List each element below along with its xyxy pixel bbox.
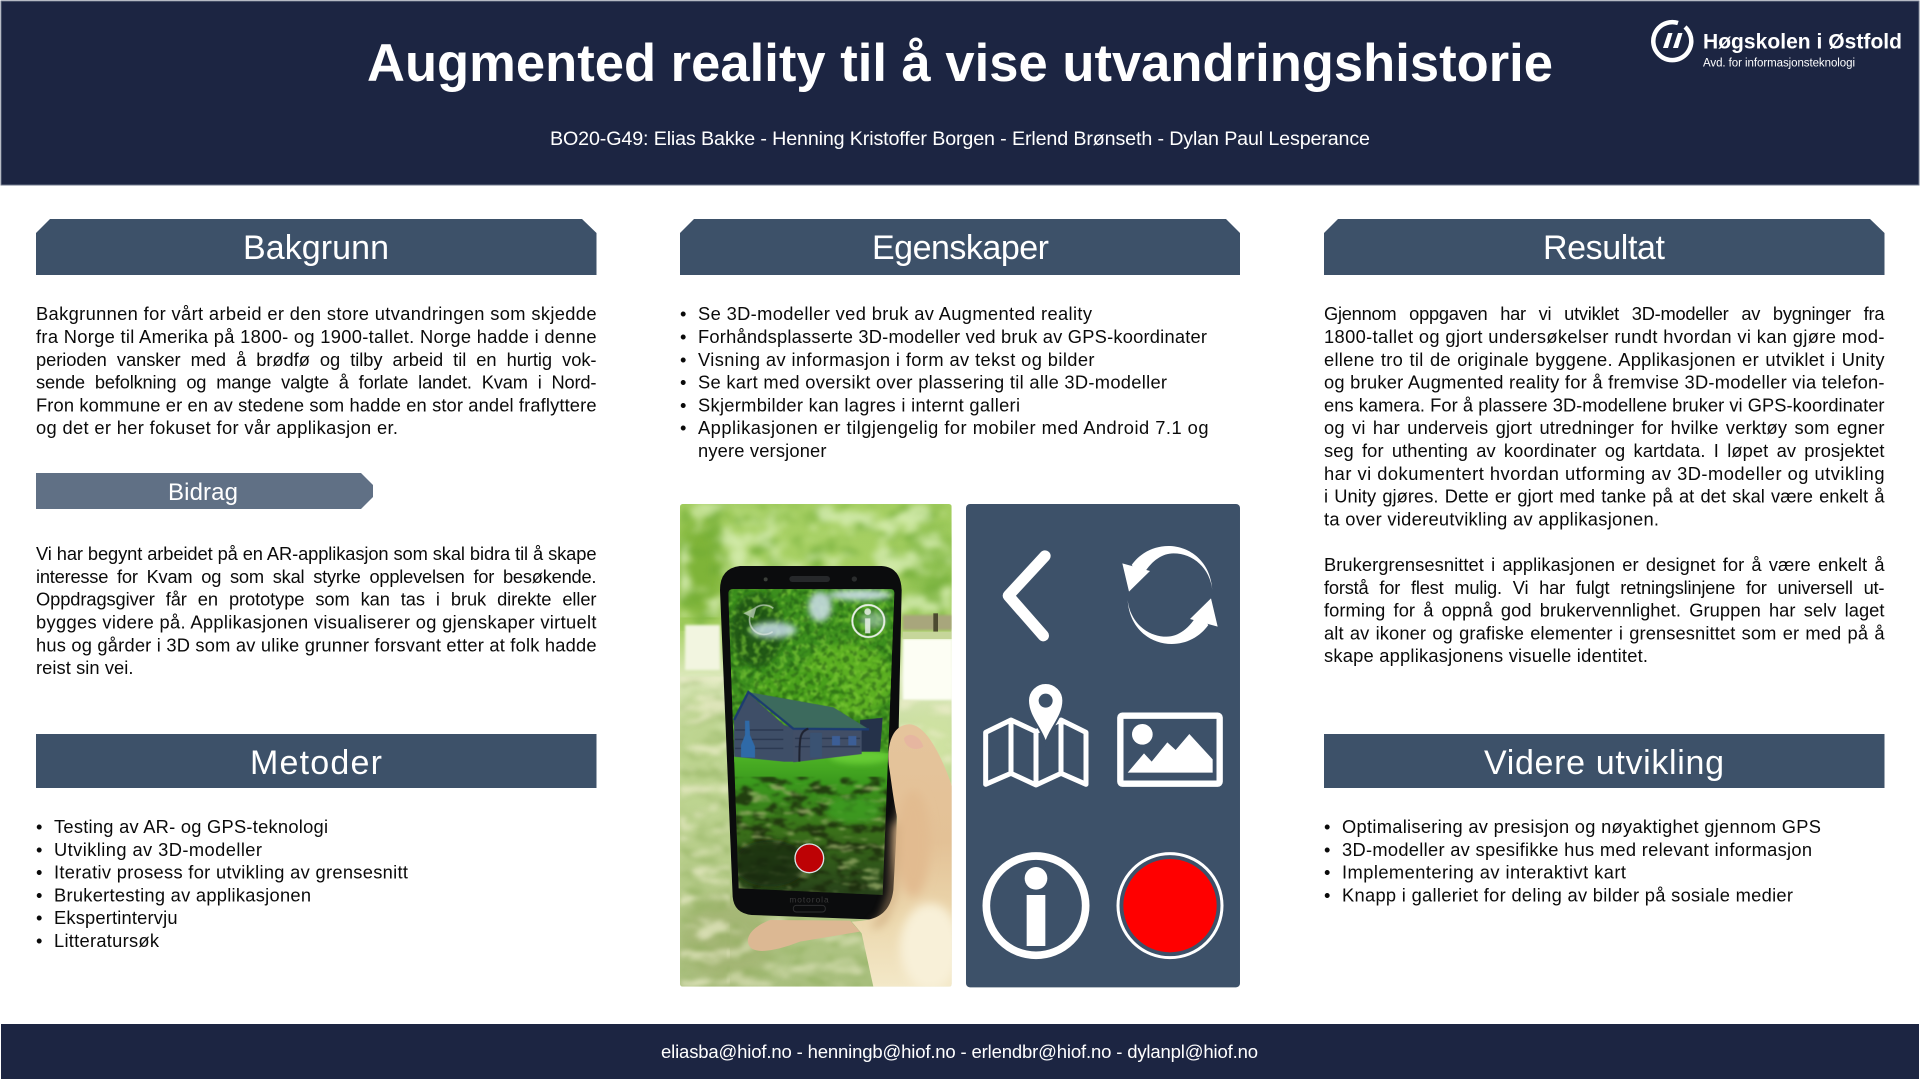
- list: Metoder: •: [36, 930, 42, 951]
- heading: Bidrag: Bidrag: [168, 479, 238, 506]
- panel: app icons: [966, 504, 1240, 987]
- heading: Egenskaper: [680, 219, 1240, 275]
- text block: Resultat: ellene tro til de originale byggene. Applikasjonen er utviklet i Unity: [1324, 349, 1885, 370]
- text block: Bidrag: Vi har begynt arbeidet på en AR-applikasjon som skal bidra til å skape: [36, 543, 596, 564]
- text block: Bakgrunn: [36, 303, 596, 438]
- text block: Resultat: [1324, 303, 1885, 666]
- list: Egenskaper: •: [680, 372, 686, 392]
- header band: [1, 1, 1919, 185]
- heading: Videre utvikling: Videre utvikling: [1484, 744, 1724, 782]
- text block: Bidrag: Oppdragsgiver får en prototype som kan tas i bruk direkte eller: [36, 588, 596, 610]
- icon: record button: [1118, 854, 1222, 958]
- screen button: info: [852, 605, 884, 637]
- heading: Metoder: [36, 734, 596, 788]
- list: Videre utvikling: Optimalisering av presisjon og nøyaktighet gjennom GPS: [1342, 816, 1821, 837]
- list: Metoder: Iterativ prosess for utvikling av grensesnitt: [54, 862, 408, 882]
- list: Metoder: Litteratursøk: [54, 930, 160, 951]
- list: Metoder: •: [36, 862, 42, 882]
- text block: Bidrag: bygges videre på. Applikasjonen visualiserer og gjenskaper virtuelt: [36, 612, 596, 632]
- text block: Bakgrunn: fra Norge til Amerika på 1800- og 1900-tallet. Norge hadde i denne: [36, 326, 596, 347]
- heading: Bakgrunn: Bakgrunn: [243, 229, 389, 267]
- heading: Videre utvikling: [1324, 734, 1884, 788]
- list: Egenskaper: Skjermbilder kan lagres i internt galleri: [698, 394, 1020, 416]
- panel: Bidrag: [36, 473, 596, 678]
- list: Metoder: Utvikling av 3D-modeller: [54, 839, 262, 860]
- text block: Bakgrunn: sende befolkning og mange valgte å forlate landet. Kvam i Nord-: [36, 372, 596, 392]
- list: Egenskaper: •: [680, 326, 686, 347]
- heading: Egenskaper: Egenskaper: [872, 229, 1049, 267]
- list: Videre utvikling: [1324, 816, 1821, 906]
- heading: Resultat: [1324, 219, 1884, 275]
- contact emails: eliasba@hiof.no - henningb@hiof.no - erlendbr@hiof.no - dylanpl@hiof.no: [661, 1041, 1258, 1062]
- list: Videre utvikling: 3D-modeller av spesifikke hus med relevant informasjon: [1342, 839, 1812, 860]
- list: Egenskaper: Applikasjonen er tilgjengelig for mobiler med Android 7.1 og: [698, 417, 1208, 438]
- foliage texture: [680, 504, 952, 631]
- list: Egenskaper: •: [680, 394, 686, 416]
- screen lawn: [727, 753, 897, 897]
- text block: Resultat: alt av ikoner og grafiske elementer i grensesnittet som er med på å: [1324, 622, 1885, 644]
- heading: Resultat: Resultat: [1543, 229, 1666, 267]
- text block: Bidrag: [36, 543, 596, 678]
- phone speaker and brand: motorola: [789, 894, 829, 904]
- logo: Høgskolen i Østfold: [1653, 22, 1902, 70]
- text block: Resultat: forming for å oppnå god brukervennlighet. Gruppen har selv laget: [1324, 600, 1884, 620]
- photo: AR app on phone: [673, 504, 960, 990]
- list: Metoder: •: [36, 839, 42, 860]
- list: Metoder: Testing av AR- og GPS-teknologi: [54, 816, 328, 837]
- list: Videre utvikling: •: [1324, 884, 1330, 906]
- text block: Bakgrunn: Fron kommune er en av stedene som hadde en stor andel fraflyttere: [36, 394, 596, 416]
- text block: Resultat: seg for uthenting av koordinater og kartdata. I løpet av prosjektet: [1324, 440, 1884, 461]
- logo: Høgskolen i Østfold: Høgskolen i Østfold: [1703, 30, 1902, 54]
- heading: Bidrag: [36, 473, 373, 509]
- text block: Resultat: skape applikasjonens visuelle identitet.: [1324, 645, 1648, 666]
- list: Metoder: Brukertesting av applikasjonen: [54, 884, 311, 906]
- heading: Bakgrunn: [36, 219, 596, 275]
- lawn glare: [903, 638, 953, 700]
- heading: Metoder: Metoder: [250, 744, 382, 782]
- list: Metoder: Ekspertintervju: [54, 907, 178, 928]
- text block: Bidrag: hus og gårder i 3D som av ulike grunner forsvant etter at folk hadde: [36, 634, 596, 656]
- list: Metoder: •: [36, 816, 42, 837]
- text block: Bakgrunn: Bakgrunnen for vårt arbeid er den store utvandringen som skjedde: [36, 303, 596, 324]
- icon: refresh: [1122, 546, 1218, 644]
- icon: map with pin: [986, 683, 1086, 785]
- text block: Resultat: Gjennom oppgaven har vi utviklet 3D-modeller av bygninger fra: [1324, 303, 1885, 324]
- list: Videre utvikling: •: [1324, 862, 1330, 882]
- list: Metoder: •: [36, 907, 42, 928]
- list: Egenskaper: Se kart med oversikt over plassering til alle 3D-modeller: [698, 372, 1167, 392]
- text block: Resultat: forstå for flest mulig. Vi har fulgt retningslinjene for universell ut-: [1324, 577, 1884, 598]
- footer band: [1, 1024, 1919, 1079]
- phone body: [720, 566, 902, 920]
- list: Metoder: [36, 816, 408, 951]
- panel: Metoder: [36, 734, 596, 951]
- text block: Bakgrunn: perioden vansker med å brødfø og tilby arbeid til en hurtig vok-: [36, 349, 596, 370]
- list: Metoder: •: [36, 884, 42, 906]
- list: Egenskaper: Se 3D-modeller ved bruk av Augmented reality: [698, 303, 1093, 324]
- screen button: record: [795, 844, 824, 873]
- text block: Resultat: og vi har underveis gjort utredninger for hvilke verktøy som egner: [1324, 417, 1884, 438]
- list: Egenskaper: nyere versjoner: [698, 440, 826, 461]
- title: Augmented reality til å vise utvandringshistorie: [367, 34, 1553, 93]
- text block: Resultat: ta over videreutvikling av applikasjonen.: [1324, 508, 1659, 530]
- 3D house: [734, 692, 883, 762]
- panel: Videre utvikling: [1324, 734, 1884, 906]
- icon: back chevron: [1008, 556, 1045, 636]
- list: Egenskaper: Visning av informasjon i form av tekst og bilder: [698, 349, 1094, 370]
- panel: Bakgrunn: [36, 219, 596, 438]
- text block: Bidrag: reist sin vei.: [36, 657, 134, 678]
- phone speaker and brand: [764, 576, 857, 912]
- grass texture: [680, 677, 730, 987]
- hand holding phone: [748, 724, 960, 990]
- authors: BO20-G49: Elias Bakke - Henning Kristoffer Borgen - Erlend Brønseth - Dylan Paul Lesperance: [550, 128, 1370, 150]
- panel: Resultat: [1324, 219, 1885, 666]
- phone screen: [727, 589, 897, 897]
- icon: gallery image: [1120, 716, 1220, 784]
- screen button: back and refresh: [743, 605, 773, 634]
- list: Egenskaper: •: [680, 417, 686, 438]
- list: Egenskaper: Forhåndsplasserte 3D-modeller ved bruk av GPS-koordinater: [698, 326, 1207, 347]
- text block: Resultat: Brukergrensesnittet i applikasjonen er designet for å være enkelt å: [1324, 554, 1885, 575]
- list: Egenskaper: •: [680, 349, 686, 370]
- list: Videre utvikling: •: [1324, 839, 1330, 860]
- text block: Resultat: 1800-tallet og gjort undersøkelser rundt hvordan vi kan gjøre mod-: [1324, 326, 1884, 347]
- list: Videre utvikling: Implementering av interaktivt kart: [1342, 862, 1626, 882]
- logo: Høgskolen i Østfold: Avd. for informasjonsteknologi: [1703, 58, 1855, 70]
- text block: Resultat: har vi dokumentert hvordan utforming av 3D-modeller og utvikling: [1324, 463, 1884, 484]
- list: Videre utvikling: Knapp i galleriet for deling av bilder på sosiale medier: [1342, 884, 1793, 906]
- text block: Bidrag: interesse for Kvam og som skal styrke opplevelsen for besøkende.: [36, 566, 596, 587]
- list: Egenskaper: [680, 303, 1208, 461]
- panel: Egenskaper: [673, 219, 1240, 990]
- list: Egenskaper: •: [680, 303, 686, 324]
- text block: Resultat: i Unity gjøres. Dette er gjort med tanke på at det skal være enkelt å: [1324, 486, 1885, 506]
- icon: info: [986, 856, 1086, 955]
- text block: Resultat: og bruker Augmented reality for å fremvise 3D-modeller via telefon-: [1324, 372, 1884, 392]
- text block: Resultat: ens kamera. For å plassere 3D-modellene bruker vi GPS-koordinater: [1324, 394, 1884, 416]
- text block: Bakgrunn: og det er her fokuset for vår applikasjon er.: [36, 417, 398, 438]
- list: Videre utvikling: •: [1324, 816, 1330, 837]
